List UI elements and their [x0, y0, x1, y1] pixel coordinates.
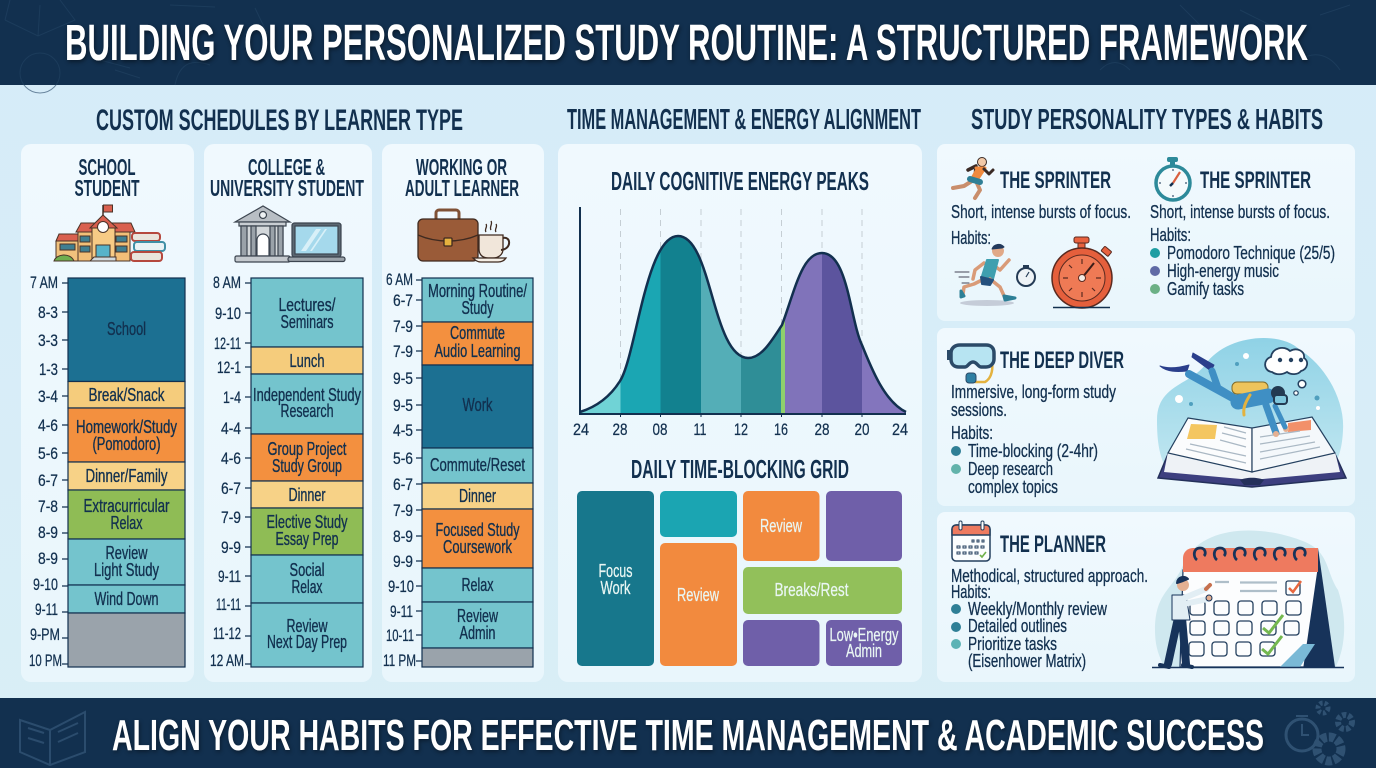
icon: diving mask	[947, 345, 994, 383]
area chart: energy peaks: 24	[892, 420, 908, 439]
time axis: 9-5	[393, 396, 413, 415]
bar labels: Coursework	[443, 537, 513, 557]
time axis: 1-3	[39, 360, 58, 379]
bar labels: Commute	[450, 323, 505, 343]
bar labels: Social	[290, 560, 324, 580]
panel: time management	[558, 144, 922, 682]
deep diver title: THE DEEP DIVER	[1000, 347, 1124, 374]
bar labels: Essay Prep	[276, 529, 338, 549]
time axis	[210, 273, 251, 670]
time axis: 12-11	[214, 334, 241, 353]
bar labels: Homework/Study	[76, 417, 177, 437]
bar labels: Morning Routine/	[428, 281, 527, 301]
habits label 1: Habits:	[951, 228, 991, 248]
bar labels: Dinner/Family	[86, 466, 168, 486]
area chart: energy peaks: 08	[652, 420, 668, 439]
time axis	[383, 270, 422, 670]
deep diver description	[951, 382, 1116, 420]
time axis: 5-6	[38, 444, 58, 463]
panel: the deep diver	[937, 328, 1355, 506]
time-blocking grid: Low•Energy	[830, 625, 898, 645]
bar labels: Light Study	[94, 560, 159, 580]
bar labels: Group Project	[268, 439, 346, 459]
card title	[74, 154, 140, 201]
card title: ADULT LEARNER	[405, 175, 519, 201]
bar labels: Study Group	[272, 456, 342, 476]
bar labels: Wind Down	[94, 589, 158, 609]
habits list 2: Gamify tasks	[1167, 279, 1244, 299]
time axis: 4-6	[38, 416, 58, 435]
bar labels: Lunch	[290, 351, 324, 371]
planner title: THE PLANNER	[1000, 531, 1106, 558]
time axis: 7-9	[393, 342, 413, 361]
grid title: DAILY TIME-BLOCKING GRID	[631, 454, 849, 484]
card title: WORKING OR	[416, 154, 507, 180]
time axis	[29, 273, 68, 670]
time axis: 6-7	[393, 475, 413, 494]
card title: SCHOOL	[78, 154, 136, 180]
time axis: 6-7	[221, 479, 241, 498]
area chart: energy peaks: 20	[854, 420, 870, 439]
bar labels: School	[107, 319, 146, 339]
time axis: 8-9	[38, 523, 58, 542]
habits list: Habits:	[951, 423, 993, 443]
time axis: 10 PM	[29, 651, 62, 670]
time axis: 7-8	[38, 497, 58, 516]
bar labels: Commute/Reset	[430, 455, 525, 475]
schedule bar	[68, 278, 185, 667]
time axis: 11-12	[213, 624, 241, 643]
bar labels: Elective Study	[266, 512, 348, 532]
thought cloud	[1265, 348, 1307, 395]
card title	[405, 154, 519, 201]
bar labels: Review	[457, 606, 499, 626]
card title	[210, 154, 364, 201]
time axis: 8-9	[38, 549, 58, 568]
habits list: Time-blocking (2-4hr)	[968, 441, 1098, 461]
bar labels: (Pomodoro)	[92, 434, 160, 454]
bar labels: Next Day Prep	[267, 632, 347, 652]
bar labels: Dinner	[288, 485, 326, 505]
habits list 2	[1150, 225, 1335, 299]
area chart: energy peaks: 24	[573, 420, 589, 439]
time-blocking grid: Admin	[846, 641, 882, 661]
time axis: 7-9	[393, 501, 413, 520]
person	[1160, 577, 1212, 667]
time axis: 6-7	[393, 291, 413, 310]
bar labels	[253, 295, 361, 652]
diver	[1160, 353, 1289, 437]
bar labels: Study	[462, 298, 494, 318]
time axis: 9-11	[35, 600, 58, 619]
time axis: 11-11	[216, 595, 241, 614]
time axis: 3-3	[38, 331, 58, 350]
time axis: 9-10	[388, 577, 414, 596]
header banner	[0, 0, 1376, 93]
heading: time management: TIME MANAGEMENT & ENERGY ALIGNMENT	[567, 104, 921, 136]
habits list 2: Habits:	[1150, 225, 1191, 245]
icon: school building with books	[54, 205, 165, 261]
sprinter title 2: THE SPRINTER	[1200, 167, 1311, 194]
deep diver description: sessions.	[951, 400, 1007, 420]
time axis: 9-5	[393, 369, 413, 388]
time axis: 7 AM	[30, 273, 58, 292]
time axis: 9-11	[390, 602, 413, 621]
area chart: energy peaks: 28	[612, 420, 628, 439]
bar labels: Relax	[110, 513, 142, 533]
icon: big stopwatch	[1052, 237, 1112, 308]
time axis: 3-4	[38, 387, 58, 406]
habits list	[951, 423, 1098, 497]
time-blocking grid: Work	[600, 578, 631, 598]
icon: briefcase and coffee	[418, 210, 509, 262]
time axis: 6-7	[38, 471, 58, 490]
planner description and habits: Habits:	[951, 582, 991, 602]
bar labels: Lectures/	[278, 295, 336, 315]
bar labels: Review	[106, 543, 148, 563]
panel: school student	[21, 144, 194, 682]
area chart: energy peaks: 16	[774, 420, 788, 439]
time axis: 9-PM	[30, 625, 60, 644]
time axis: 8-9	[393, 527, 413, 546]
panel: the sprinter	[937, 144, 1355, 321]
time axis: 9-9	[393, 552, 413, 571]
area chart: energy peaks: 11	[694, 420, 706, 439]
time axis: 9-9	[221, 538, 241, 557]
chart title: DAILY COGNITIVE ENERGY PEAKS	[611, 166, 869, 196]
panel: college student	[204, 144, 372, 682]
time axis: 12-1	[217, 358, 241, 377]
planner description and habits	[951, 566, 1148, 671]
bar labels: Research	[280, 401, 334, 421]
time-blocking grid: Focus	[598, 561, 632, 581]
illustration: runner	[955, 244, 1015, 306]
icon: small runner	[953, 158, 993, 198]
time axis: 10-11	[386, 626, 414, 645]
card title: UNIVERSITY STUDENT	[210, 175, 364, 201]
planner description and habits: Prioritize tasks	[968, 634, 1057, 654]
bar labels	[428, 281, 527, 643]
bar labels	[76, 319, 177, 609]
bar labels: Work	[462, 395, 493, 415]
bar labels: Break/Snack	[88, 385, 165, 405]
bar labels: Seminars	[280, 312, 334, 332]
heading: custom schedules: CUSTOM SCHEDULES BY LEARNER TYPE	[96, 104, 463, 137]
card title: COLLEGE &	[248, 154, 325, 180]
icon: faint stopwatch and gears	[1286, 703, 1352, 761]
bar labels: Review	[286, 616, 328, 636]
bar labels: Admin	[460, 623, 496, 643]
time axis: 12 AM	[210, 651, 244, 670]
area chart: energy peaks: 28	[814, 420, 830, 439]
deep diver description: Immersive, long-form study	[951, 382, 1116, 402]
time axis: 8 AM	[213, 273, 241, 292]
time-blocking grid: Review	[760, 516, 803, 536]
time axis: 9-10	[33, 575, 58, 594]
habits list: Deep research	[968, 459, 1053, 479]
bar labels: Dinner	[459, 486, 496, 506]
schedule bar	[422, 278, 533, 667]
time axis: 9-11	[218, 567, 241, 586]
bar labels: Focused Study	[436, 520, 520, 540]
habits list: complex topics	[968, 477, 1058, 497]
sprinter title 1: THE SPRINTER	[1000, 167, 1111, 194]
planner description and habits: Detailed outlines	[968, 616, 1067, 636]
time axis: 7-9	[221, 508, 241, 527]
time-blocking grid: Review	[677, 585, 720, 605]
time axis: 4-4	[221, 419, 241, 438]
planner description and habits: (Eisenhower Matrix)	[968, 651, 1086, 671]
area chart: energy peaks: 12	[734, 420, 748, 439]
time axis: 9-10	[215, 304, 241, 323]
planner description and habits: Weekly/Monthly review	[968, 599, 1108, 619]
icon: university and laptop	[235, 206, 345, 262]
time axis: 4-5	[393, 421, 413, 440]
habits list 2: High-energy music	[1167, 261, 1279, 281]
bar labels: Relax	[462, 575, 494, 595]
schedule bar	[251, 278, 363, 667]
icon: tiny stopwatch	[1017, 265, 1035, 286]
time axis: 7-9	[393, 317, 413, 336]
icon: teal stopwatch	[1156, 157, 1190, 200]
footer banner	[0, 698, 1376, 768]
time axis: 6 AM	[386, 270, 413, 289]
bar labels: Extracurricular	[84, 496, 170, 516]
time axis: 4-6	[221, 449, 241, 468]
time axis: 11 PM	[383, 651, 416, 670]
icon: faint open book	[20, 712, 85, 765]
illustration: diver over open book	[1157, 338, 1346, 487]
panel: the planner	[937, 512, 1355, 682]
time-blocking grid: Breaks/Rest	[774, 580, 848, 600]
time-blocking grid	[577, 491, 902, 666]
time axis: 5-6	[393, 449, 413, 468]
panel: working adult	[382, 144, 544, 682]
sprinter description 1: Short, intense bursts of focus.	[951, 202, 1131, 222]
book	[1158, 454, 1346, 487]
area chart: energy peaks	[573, 200, 908, 439]
planner description and habits: Methodical, structured approach.	[951, 566, 1148, 586]
bar labels: Relax	[292, 577, 322, 597]
bar labels: Independent Study	[253, 385, 361, 405]
icon: calendar	[952, 521, 990, 561]
time axis: 8-3	[38, 303, 58, 322]
bar labels: Audio Learning	[434, 341, 520, 361]
card title: STUDENT	[74, 175, 140, 201]
illustration: planner and wall calendar	[1152, 530, 1344, 668]
time axis: 1-4	[223, 388, 241, 407]
